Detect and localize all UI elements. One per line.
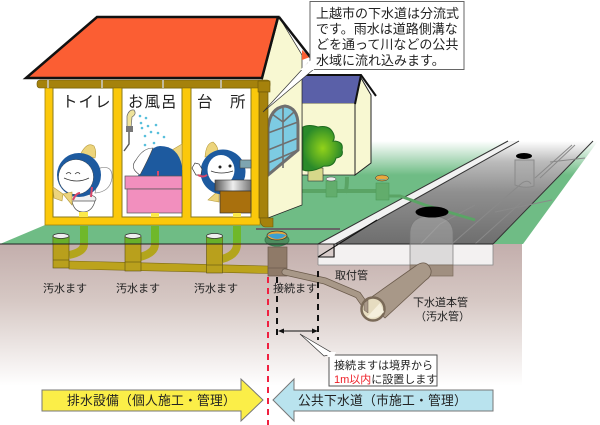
road edge lines and curb [318, 141, 593, 244]
heading: bath: お風呂 [128, 93, 178, 111]
arched window [268, 106, 298, 175]
bath room panel [122, 88, 182, 217]
kitchen room panel: 所 [230, 93, 246, 111]
heading: kitchen: 台 [197, 93, 213, 111]
arrow: public sewer [273, 379, 493, 421]
labels: basins and pipes: 汚水ます [116, 282, 160, 295]
distant house drain pipes and basins [302, 175, 475, 220]
sewage basins and house drain pipes [53, 226, 268, 274]
boundary line (red dashed) [267, 277, 269, 425]
labels: basins and pipes: 下水道本管 [413, 295, 468, 309]
labels: basins and pipes: 汚水ます [43, 282, 87, 295]
tree [303, 126, 342, 181]
toilet room panel [53, 88, 113, 217]
far manhole and underground pipes (seen through road) [415, 145, 585, 262]
callout: connection basin placement: 接続ますは境界から [334, 358, 433, 372]
character at sink [192, 142, 246, 202]
arrow: public sewer: 公共下水道（市施工・管理） [298, 393, 467, 408]
character on toilet [53, 145, 112, 217]
eaves gutter and downspout [37, 80, 340, 229]
character in bath [133, 144, 182, 176]
lateral connection pipe [285, 272, 367, 308]
labels: basins and pipes: 取付管 [335, 268, 368, 282]
labels: basins and pipes: （汚水管） [415, 309, 470, 323]
heading: toilet: トイレ [62, 94, 112, 111]
main roof [26, 17, 278, 78]
distant house [302, 75, 376, 175]
shower and water drops [124, 110, 165, 151]
road cross section block [0, 220, 493, 265]
callout: separate sewer system note: どを通って川などの公共 [316, 37, 458, 52]
arrow: private drainage equipment [42, 379, 263, 421]
callout: connection basin placement [300, 334, 437, 386]
labels: basins and pipes [43, 268, 470, 323]
labels: basins and pipes: 汚水ます [194, 282, 238, 295]
kitchen room panel [191, 88, 251, 217]
labels: basins and pipes: 接続ます [273, 281, 317, 295]
road surface [335, 141, 593, 244]
sink and cabinet [215, 160, 251, 217]
connection basin [265, 231, 289, 276]
dashed 1m range with double arrow [277, 271, 318, 340]
near manhole riser (transparent) [410, 206, 453, 276]
callout: separate sewer system note [263, 2, 464, 112]
sewer main pipe [362, 263, 431, 320]
soil cross section [0, 244, 522, 387]
callout: separate sewer system note: 水域に流れ込みます。 [316, 53, 445, 68]
ground: lawn [0, 141, 598, 244]
bathtub [125, 176, 182, 217]
arrow: private drainage equipment: 排水設備（個人施工・管理） [67, 393, 236, 408]
callout: connection basin placement: 1m以内に設置します [334, 372, 437, 386]
main house front frame [45, 86, 260, 225]
callout: separate sewer system note: 上越市の下水道は分流式 [316, 6, 459, 21]
callout: separate sewer system note: です。雨水は道路側溝な [316, 22, 458, 36]
main house side wall [262, 17, 311, 218]
